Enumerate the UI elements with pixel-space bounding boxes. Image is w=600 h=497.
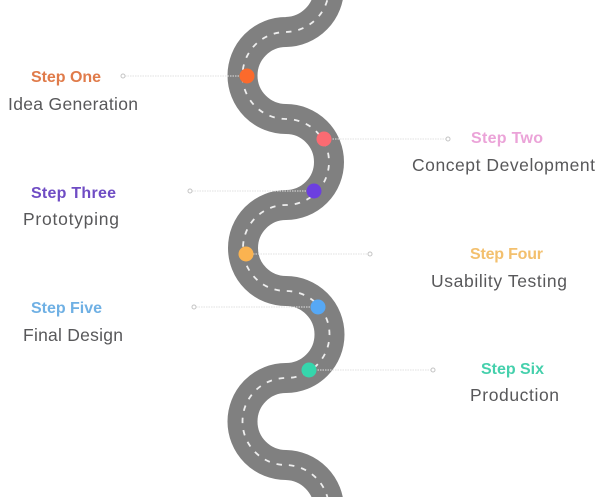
- step two: connector and marker: [316, 132, 450, 146]
- step six: connector and marker: [302, 362, 435, 378]
- label: step five: Final Design: [23, 325, 123, 345]
- label: step one: [8, 69, 138, 114]
- label: step one: Step One: [31, 69, 101, 86]
- label: step two: Step Two: [471, 130, 543, 147]
- step four: connector and marker: [238, 246, 372, 262]
- label: step four: [431, 246, 567, 291]
- label: step three: Prototyping: [23, 209, 119, 229]
- label: step two: [412, 130, 595, 175]
- label: step five: [23, 300, 123, 345]
- label: step one: Idea Generation: [8, 94, 138, 114]
- step five: connector and marker: [192, 300, 326, 314]
- label: step six: [470, 361, 559, 405]
- label: step two: Concept Development: [412, 155, 595, 175]
- step three: connector and marker: [188, 184, 322, 198]
- label: step six: Production: [470, 385, 559, 405]
- label: step three: Step Three: [31, 185, 116, 202]
- label: step three: [23, 185, 119, 229]
- label: step four: Step Four: [470, 246, 543, 263]
- label: step six: Step Six: [481, 361, 544, 378]
- step one: connector and marker: [121, 68, 254, 84]
- label: step five: Step Five: [31, 300, 102, 317]
- label: step four: Usability Testing: [431, 271, 567, 291]
- winding road: [242, 0, 330, 497]
